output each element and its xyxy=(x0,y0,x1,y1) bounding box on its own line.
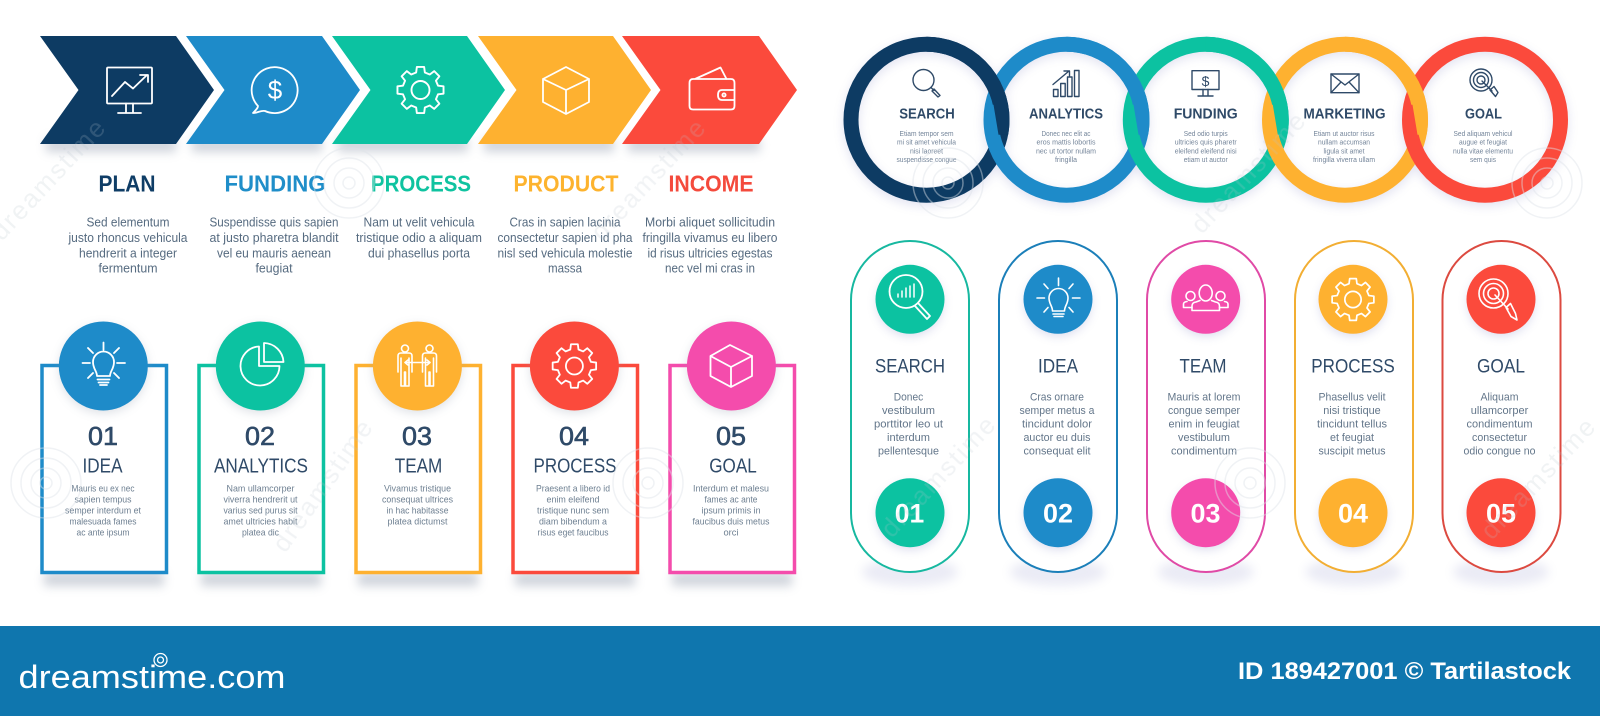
text block: funding description: vel eu mauris aenean xyxy=(217,246,331,260)
pill: process: et feugiat xyxy=(1330,432,1375,444)
ring text: analytics: nec ut tortor nullam xyxy=(1036,146,1096,155)
pill: team: condimentum xyxy=(1171,446,1237,458)
card: 02 analytics: amet ultricies habit xyxy=(224,516,298,528)
pill: search: SEARCH xyxy=(875,356,945,378)
text block: plan description: fermentum xyxy=(98,262,158,276)
pill: goal: consectetur xyxy=(1472,432,1527,444)
card: 02 analytics: platea dic xyxy=(242,528,279,538)
pill: search: pellentesque xyxy=(878,446,939,458)
icon: wallet xyxy=(690,68,734,110)
pill: search: vestibulum xyxy=(882,405,935,417)
pill: process xyxy=(1295,241,1413,586)
ring text: marketing xyxy=(1313,129,1375,164)
card: 02 analytics: Nam ullamcorper xyxy=(226,484,294,494)
watermark overlay: dreamstime xyxy=(1474,411,1600,545)
pill: goal: 05 xyxy=(1486,499,1516,529)
icon: target arrow xyxy=(1479,279,1517,320)
card: 03 team: TEAM xyxy=(395,456,442,478)
text block: plan description: justo rhoncus vehicula xyxy=(68,231,188,245)
card: 03 team: consequat ultrices xyxy=(382,494,453,506)
ring text: funding: eleifend eleifend nisi xyxy=(1175,146,1237,155)
card: 01 idea: IDEA xyxy=(82,456,123,478)
card: 02 analytics: viverra hendrerit ut xyxy=(224,494,298,506)
headings: chevron columns xyxy=(98,170,754,196)
card: 04 process: enim eleifend xyxy=(546,494,600,506)
logo: dreamstime: dreamstime.com xyxy=(18,659,286,695)
icon: dollar speech bubble xyxy=(252,67,298,113)
panel: numbered cards xyxy=(42,322,794,586)
text block: process description: tristique odio a aliquam xyxy=(356,231,482,245)
ring text: analytics: Donec nec elit ac xyxy=(1042,129,1091,138)
icon: cube xyxy=(710,345,752,387)
card: 05 goal: orci xyxy=(724,528,738,538)
interlocked rings xyxy=(851,44,1560,195)
text block: income description: id risus ultricies egestas xyxy=(648,246,772,260)
text block: income description: nec vel mi cras in xyxy=(665,262,755,276)
pill: idea: semper metus a xyxy=(1020,405,1095,417)
pill: idea: IDEA xyxy=(1038,356,1078,378)
icon: gear xyxy=(397,67,444,113)
pill: idea xyxy=(999,241,1117,586)
card: 02 analytics: ANALYTICS xyxy=(214,456,308,478)
card: 04 process: PROCESS xyxy=(534,456,616,478)
ring titles: MARKETING xyxy=(1304,106,1386,122)
headings: chevron columns: PLAN xyxy=(98,170,156,196)
chevron: plan xyxy=(40,36,214,144)
chevron: income xyxy=(622,36,797,144)
pill: team: congue semper xyxy=(1168,405,1240,417)
card: 01 idea: sapien tempus xyxy=(74,494,132,506)
text block: plan description: hendrerit a integer xyxy=(79,246,177,260)
pill: search: Donec xyxy=(894,392,924,404)
ring text: search xyxy=(896,129,957,164)
ring text: analytics: fringilla xyxy=(1055,155,1078,164)
card: 05 goal: faucibus duis metus xyxy=(692,516,770,528)
text block: income description: Morbi aliquet sollicitudin xyxy=(645,216,775,230)
icon: magnifier xyxy=(913,70,940,97)
card: 04 process: Praesent a libero id xyxy=(536,484,610,494)
icon: monitor chart xyxy=(107,68,152,113)
ring text: search: suspendisse congue xyxy=(896,155,956,164)
headings: chevron columns: PRODUCT xyxy=(514,170,618,196)
icon: gear xyxy=(1332,279,1374,320)
pill: goal: condimentum xyxy=(1466,418,1532,430)
pill: goal: ullamcorper xyxy=(1471,405,1528,417)
ring text: search: Etiam tempor sem xyxy=(900,129,954,138)
icon: dollar speech bubble: $ xyxy=(268,75,283,105)
text block: product description: consectetur sapien id pha xyxy=(498,231,633,245)
ring titles xyxy=(899,106,1502,122)
card: 05 goal: 05 xyxy=(716,421,746,451)
panel: interlocking rings xyxy=(851,44,1560,198)
chevron: funding xyxy=(186,36,360,144)
pill: team xyxy=(1147,241,1265,586)
ring titles: FUNDING xyxy=(1174,106,1238,122)
icon: monitor dollar xyxy=(1192,71,1219,96)
pill: search: interdum xyxy=(887,432,930,444)
watermark overlay: dreamstime xyxy=(874,409,1003,543)
card: 03 team: platea dictumst xyxy=(388,516,448,528)
pill: process: suscipit metus xyxy=(1318,446,1386,458)
card: 01 idea: 01 xyxy=(88,421,118,451)
pill: search: 01 xyxy=(895,499,924,529)
text block: funding description: Suspendisse quis sapien xyxy=(210,216,339,230)
pill: goal: GOAL xyxy=(1477,356,1525,378)
pill: idea: auctor eu duis xyxy=(1024,432,1091,444)
card: 01 idea: ac ante ipsum xyxy=(76,528,130,538)
icon: two people with arrow xyxy=(398,345,436,386)
icon: gear xyxy=(553,344,596,388)
panel: chevron process xyxy=(40,36,797,152)
watermark overlay: dreamstime xyxy=(266,412,380,557)
watermark overlay xyxy=(0,105,1600,557)
pill: team: vestibulum xyxy=(1178,432,1230,444)
ring titles: GOAL xyxy=(1465,106,1502,122)
icon: bar growth xyxy=(1053,70,1079,96)
ring text: funding xyxy=(1175,129,1237,164)
text block: product description: nisl sed vehicula molestie xyxy=(498,246,633,260)
card: 04 process: risus eget faucibus xyxy=(538,528,609,538)
ring text: funding: ultricies quis pharetr xyxy=(1175,138,1237,147)
pill: process: PROCESS xyxy=(1311,356,1395,378)
text block: product description: Cras in sapien lacinia xyxy=(510,216,621,230)
card: 02 analytics xyxy=(199,322,324,586)
ring text: analytics xyxy=(1036,129,1096,164)
card: 01 idea: Mauris eu ex nec xyxy=(72,484,135,494)
card: 01 idea: semper interdum et xyxy=(65,506,141,516)
card: 01 idea xyxy=(42,322,166,586)
card: 02 analytics: 02 xyxy=(245,421,275,451)
ring text: goal xyxy=(1453,129,1513,164)
text block: product description: massa xyxy=(548,262,582,276)
chevron shadows xyxy=(46,138,760,152)
text block: process description xyxy=(356,216,482,260)
pill: process: Phasellus velit xyxy=(1318,392,1386,404)
text block: process description: Nam ut velit vehicula xyxy=(364,216,475,230)
pill: idea: consequat elit xyxy=(1024,446,1091,458)
ring text: marketing: fringilla viverra ullam xyxy=(1313,155,1375,164)
ring text: marketing: nullam accumsan xyxy=(1318,138,1370,147)
ring text: funding: Sed odio turpis xyxy=(1184,129,1228,138)
pill: search: porttitor leo ut xyxy=(874,418,944,430)
card: 03 team: Vivamus tristique xyxy=(384,484,451,494)
icon: target xyxy=(1470,69,1498,96)
ring text: marketing: Etiam ut auctor risus xyxy=(1314,129,1375,138)
card: 04 process: tristique nunc sem xyxy=(537,506,609,516)
pill: process: nisi tristique xyxy=(1323,405,1381,417)
card: 05 goal: ipsum primis in xyxy=(702,506,760,516)
text block: funding description: feugiat xyxy=(256,262,293,276)
pill: idea: 02 xyxy=(1043,499,1073,529)
pill: team: Mauris at lorem xyxy=(1168,392,1240,404)
pill: search xyxy=(851,241,969,586)
card: 04 process xyxy=(513,322,638,586)
text block: income description xyxy=(642,216,778,276)
text block: plan description xyxy=(68,216,188,276)
pill: team: 03 xyxy=(1190,499,1220,529)
pill: team: enim in feugiat xyxy=(1168,418,1240,430)
pill: goal: Aliquam xyxy=(1480,392,1518,404)
text block: funding description xyxy=(210,216,339,276)
chevron: product xyxy=(478,36,651,144)
pill: process: 04 xyxy=(1338,499,1368,529)
watermark overlay: dreamstime xyxy=(584,112,713,246)
card: 04 process: 04 xyxy=(559,421,589,451)
icon: light bulb xyxy=(82,342,125,385)
card: 05 goal: Interdum et malesu xyxy=(693,484,769,494)
card: 03 team: 03 xyxy=(402,421,432,451)
pill: idea: Cras ornare xyxy=(1030,392,1084,404)
icon: pie chart xyxy=(241,343,284,385)
ring text: goal: Sed aliquam vehicul xyxy=(1454,129,1513,138)
icon: light bulb xyxy=(1037,278,1080,316)
panel: pill columns xyxy=(851,241,1560,586)
pill: goal: odio congue no xyxy=(1464,446,1536,458)
card: 03 team: in hac habitasse xyxy=(386,506,448,516)
headings: chevron columns: INCOME xyxy=(668,170,754,196)
ring text: search: mi sit amet vehicula xyxy=(897,138,957,147)
ring titles: SEARCH xyxy=(899,106,955,122)
footer bar xyxy=(0,626,1600,716)
card: 01 idea: malesuada fames xyxy=(70,516,137,528)
ring shadows xyxy=(851,48,1560,198)
icon: three people xyxy=(1184,285,1228,310)
ring text: search: nisi laoreet xyxy=(910,146,944,155)
image id and credit: ID 189427001 © Tartilastock xyxy=(1238,658,1572,685)
card: 03 team xyxy=(356,322,480,586)
card: 04 process: diam bibendum a xyxy=(539,516,608,528)
ring text: goal: augue et feugiat xyxy=(1459,138,1508,147)
text block: process description: dui phasellus porta xyxy=(368,246,470,260)
ring text: marketing: ligula sit amet xyxy=(1324,146,1365,155)
ring text: goal: nulla vitae elementu xyxy=(1453,146,1513,155)
chevron: process xyxy=(332,36,505,144)
ring text: goal: sem quis xyxy=(1470,155,1496,164)
card: 02 analytics: varius sed purus sit xyxy=(224,506,298,516)
icon: monitor dollar: $ xyxy=(1202,73,1210,89)
ring titles: ANALYTICS xyxy=(1029,106,1103,122)
pill: goal xyxy=(1442,241,1560,586)
watermark overlay: dreamstime xyxy=(1184,105,1313,239)
pill: idea: tincidunt dolor xyxy=(1022,418,1092,430)
card: 05 goal xyxy=(670,322,794,586)
ring text: analytics: eros mattis lobortis xyxy=(1036,138,1096,147)
text block: plan description: Sed elementum xyxy=(86,216,170,230)
headings: chevron columns: PROCESS xyxy=(371,170,471,196)
pill: team: TEAM xyxy=(1180,356,1226,378)
icon: chart magnifier xyxy=(890,275,930,319)
icon: box xyxy=(543,67,589,114)
card: 05 goal: fames ac ante xyxy=(704,494,758,506)
headings: chevron columns: FUNDING xyxy=(224,170,326,196)
ring text: funding: etiam ut auctor xyxy=(1184,155,1228,164)
pill: process: tincidunt tellus xyxy=(1317,418,1387,430)
text block: funding description: at justo pharetra blandit xyxy=(210,231,339,245)
card: 05 goal: GOAL xyxy=(709,456,757,478)
icon: envelope xyxy=(1331,74,1359,93)
text block: product description xyxy=(498,216,633,276)
text block: income description: fringilla vivamus eu libero xyxy=(642,231,778,245)
